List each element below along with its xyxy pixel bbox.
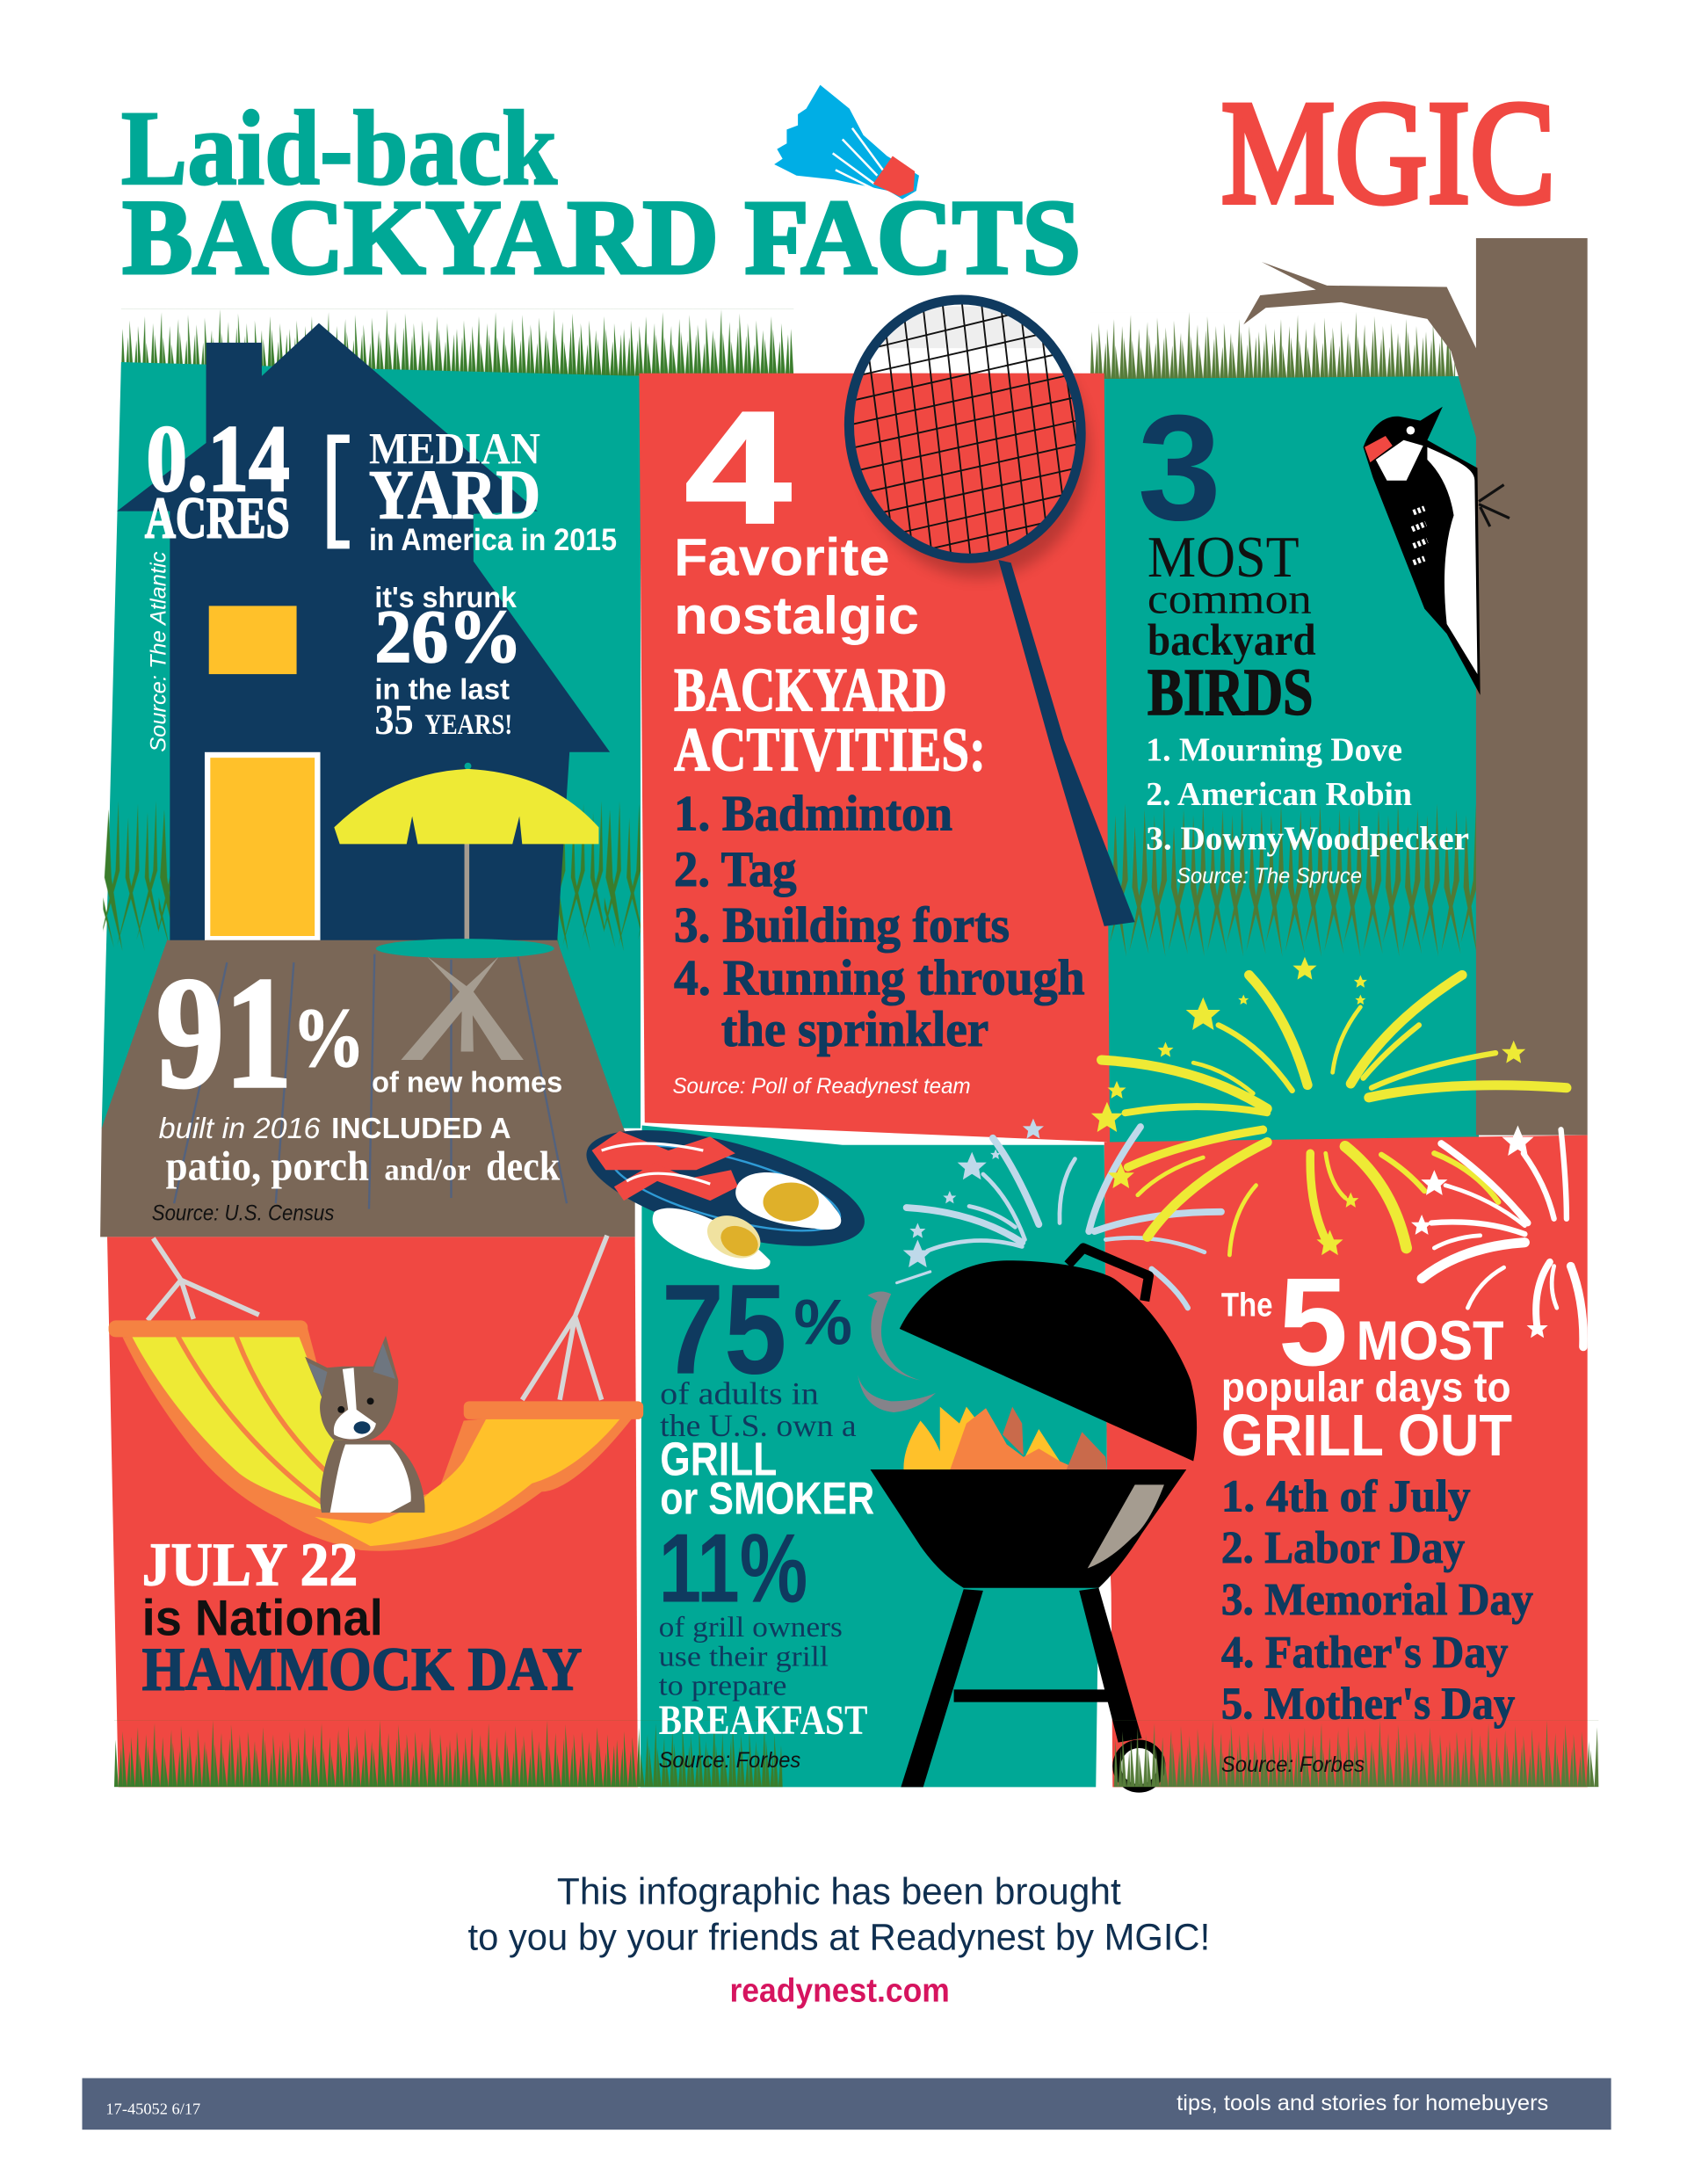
footer message	[467, 1870, 1210, 1959]
text: activities	[674, 379, 1085, 1057]
icon: grill	[871, 1248, 1197, 1789]
text: median yard: 35	[374, 695, 414, 744]
text: grill stats: the U.S. own a	[660, 1408, 857, 1443]
text: birds: 2. American Robin	[1146, 776, 1412, 813]
title	[121, 91, 1081, 297]
text: hammock day: is National	[142, 1591, 383, 1647]
house door	[207, 755, 317, 939]
panel: birds teal	[1100, 376, 1479, 1149]
title: Laid-back	[121, 91, 557, 207]
fireworks: yellow upper	[1091, 957, 1567, 1132]
text: median yard: YARD	[369, 457, 540, 534]
text: median yard: MEDIAN	[369, 424, 540, 474]
text: birds: Source: The Spruce	[1177, 864, 1362, 889]
source: forbes grill: Source: Forbes	[659, 1748, 801, 1773]
panel: hammock red	[107, 1237, 638, 1787]
icon: badminton racket	[833, 285, 1135, 926]
text: 91 percent: %	[293, 990, 365, 1084]
icon: woodpecker	[1364, 407, 1510, 695]
text: activities: 4. Running through	[674, 951, 1085, 1006]
text: grill out: GRILL OUT	[1221, 1404, 1512, 1469]
panel: grill days red	[1104, 1136, 1588, 1787]
text: grill out: 1. 4th of July	[1221, 1471, 1471, 1522]
deck	[100, 940, 635, 1237]
grass: middle right	[1110, 803, 1479, 957]
text: grill out: popular days to	[1221, 1364, 1511, 1411]
footer bar: tips, tools and stories for homebuyers	[1177, 2091, 1548, 2115]
footer link: readynest.com	[729, 1972, 950, 2009]
text: grill out: 3. Memorial Day	[1221, 1574, 1533, 1625]
umbrella and table	[334, 763, 598, 1060]
text: median yard: ACRES	[145, 487, 290, 551]
text: median yard: 26%	[374, 595, 522, 678]
source: forbes days: Source: Forbes	[1221, 1752, 1365, 1777]
text: grill out: The	[1221, 1288, 1273, 1324]
fireworks: white	[1411, 1126, 1583, 1347]
text: grill out: 5. Mother's Day	[1221, 1679, 1515, 1730]
grass: top right	[1090, 312, 1455, 379]
text: activities: 1. Badminton	[674, 787, 952, 842]
text: median yard: YEARS!	[424, 708, 512, 741]
text: birds	[1138, 384, 1469, 889]
text: grill stats: or SMOKER	[660, 1474, 874, 1525]
text: grill stats: to prepare	[659, 1670, 786, 1702]
text: 91 percent: 91	[156, 945, 293, 1121]
text: grill out: MOST	[1357, 1310, 1504, 1372]
text: activities: Favorite	[674, 527, 890, 587]
text: birds: MOST	[1148, 526, 1300, 590]
text: median yard: it's shrunk	[374, 582, 517, 614]
text: median yard	[145, 407, 617, 744]
text: 91 percent: deck	[486, 1143, 561, 1189]
text: birds: 1. Mourning Dove	[1146, 731, 1402, 768]
icon: smoke	[858, 1291, 936, 1412]
text: grill out: 5	[1278, 1252, 1348, 1392]
text: grill stats	[659, 1258, 874, 1744]
footer message: to you by your friends at Readynest by MGIC!	[467, 1917, 1210, 1959]
icon: breakfast plate	[575, 1107, 876, 1270]
grass: top left	[121, 309, 793, 376]
text: 91 percent: INCLUDED A	[331, 1113, 511, 1145]
fireworks: yellow lower	[1108, 1129, 1498, 1255]
source: readynest poll: Source: Poll of Readynest team	[672, 1074, 971, 1099]
panel: activities red	[639, 374, 1110, 1143]
text: activities: 4	[685, 379, 791, 556]
text: activities: 3. Building forts	[674, 897, 1010, 953]
text: birds: common	[1148, 574, 1312, 622]
text: 91 percent: patio, porch	[166, 1143, 369, 1189]
text: activities: BACKYARD	[674, 655, 947, 724]
grass: bottom right	[1114, 1720, 1598, 1787]
fireworks: blue	[897, 1119, 1221, 1308]
text: median yard: 0.14	[146, 407, 290, 512]
text: median yard: in America in 2015	[369, 523, 617, 557]
text: hammock day	[142, 1532, 582, 1703]
text: 91 percent: built in 2016	[159, 1113, 321, 1145]
text: grill stats: BREAKFAST	[659, 1698, 867, 1744]
text: grill stats: 75	[662, 1258, 786, 1401]
icon: dog	[305, 1336, 424, 1513]
grass: bottom left	[114, 1720, 783, 1787]
logo: MGIC: MGIC	[1221, 71, 1555, 235]
text: birds: 3. DownyWoodpecker	[1146, 821, 1469, 858]
icon: hammock	[109, 1320, 643, 1551]
panel: yard teal	[102, 362, 641, 1128]
source: census: Source: U.S. Census	[152, 1201, 335, 1225]
footer message: This infographic has been brought	[557, 1870, 1121, 1912]
text: median yard: in the last	[374, 674, 510, 707]
icon: shuttlecock	[774, 85, 919, 200]
text: hammock day: JULY 22	[142, 1532, 358, 1600]
text: activities: nostalgic	[674, 585, 919, 645]
text: grill stats: of grill owners	[659, 1611, 843, 1643]
text: grill stats: %	[793, 1287, 852, 1358]
footer bar: 17-45052 6/17	[105, 2101, 201, 2118]
hammock ropes	[148, 1236, 607, 1400]
text: hammock day: HAMMOCK DAY	[142, 1636, 582, 1703]
text: grill stats: GRILL	[660, 1433, 777, 1485]
source: atlantic: Source: The Atlantic	[147, 551, 171, 752]
house window	[209, 606, 297, 674]
text: activities: 2. Tag	[674, 842, 797, 897]
text: 91 percent: and/or	[384, 1152, 471, 1186]
grass: middle left	[103, 801, 641, 954]
text: 91 percent: of new homes	[372, 1066, 562, 1099]
text: grill out	[1221, 1252, 1533, 1730]
text: activities: the sprinkler	[721, 1002, 988, 1057]
text: birds: BIRDS	[1148, 656, 1313, 729]
text: activities: ACTIVITIES:	[674, 715, 986, 784]
text: grill stats: of adults in	[660, 1375, 819, 1411]
text: grill stats: use their grill	[659, 1640, 829, 1672]
icon: flames	[903, 1407, 1107, 1472]
text: grill out: 4. Father's Day	[1221, 1627, 1508, 1678]
title: BACKYARD FACTS	[122, 180, 1081, 297]
text: 91 percent	[156, 945, 562, 1189]
text: birds: 3	[1138, 384, 1221, 552]
tree	[1243, 238, 1588, 1136]
text: birds: backyard	[1148, 615, 1316, 664]
panel: grill teal	[641, 1126, 1107, 1787]
footer bar	[83, 2079, 1611, 2130]
text: grill out: 2. Labor Day	[1221, 1522, 1465, 1573]
text: grill stats: 11%	[659, 1514, 807, 1623]
house	[117, 323, 610, 945]
